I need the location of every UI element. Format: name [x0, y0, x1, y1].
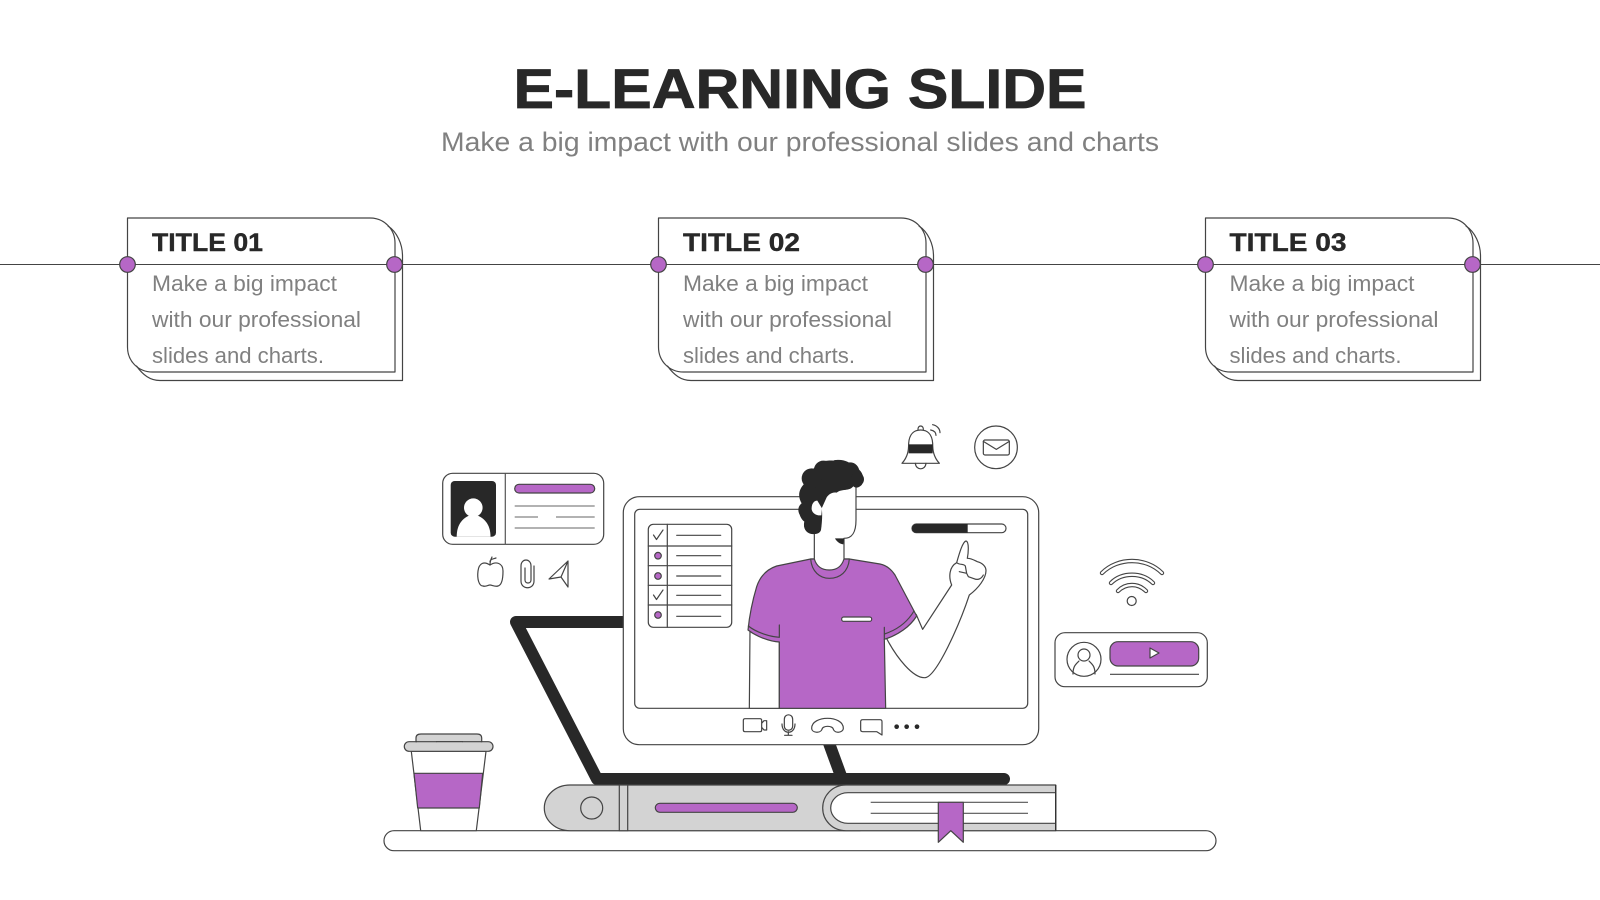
avatar [1067, 642, 1101, 676]
call controls [743, 715, 919, 735]
card body [151, 271, 361, 368]
icon: wifi [1102, 561, 1162, 606]
left arm [749, 630, 779, 708]
book: grey lower [544, 785, 860, 831]
dot left [651, 257, 666, 272]
card title: TITLE 02 [683, 229, 800, 257]
table [384, 831, 1216, 851]
video card [1055, 633, 1207, 687]
presenter figure [748, 460, 986, 708]
avatar photo [451, 481, 496, 537]
icon: paper plane [549, 561, 568, 587]
dot right [1465, 257, 1480, 272]
ear [812, 501, 822, 515]
panel: card 3 [1198, 218, 1480, 380]
progress bar [912, 524, 1006, 533]
laptop stand and base [516, 622, 1004, 779]
coffee cup [404, 734, 493, 831]
goatee [835, 538, 844, 544]
icon: apple [478, 557, 503, 586]
dot right [918, 257, 933, 272]
bookmark [938, 802, 963, 842]
neck and face [814, 485, 856, 570]
dot left [1198, 257, 1213, 272]
dot left [120, 257, 135, 272]
monitor [623, 497, 1039, 745]
dot right [387, 257, 402, 272]
card body: slides and charts. [152, 343, 324, 368]
hair [798, 460, 864, 534]
book: with pages and bookmark [823, 785, 1056, 842]
card title: TITLE 03 [1230, 229, 1346, 257]
icon: paperclip [521, 560, 534, 588]
checklist [648, 524, 732, 627]
title: E-LEARNING SLIDE [514, 57, 1086, 120]
phone [812, 718, 843, 732]
timeline line [0, 264, 1600, 266]
panel: card 1 [120, 218, 402, 380]
card body: Make a big impact [683, 271, 868, 296]
card body: with our professional [682, 307, 892, 332]
chat [861, 720, 882, 735]
card body: slides and charts. [683, 343, 855, 368]
card body: slides and charts. [1230, 343, 1402, 368]
card body [682, 271, 892, 368]
subtitle: Make a big impact with our professional slides and charts [441, 127, 1159, 157]
camera [743, 719, 767, 732]
card body: Make a big impact [152, 271, 337, 296]
shirt [748, 559, 917, 708]
arm [886, 541, 986, 678]
play button [1110, 642, 1199, 666]
card title: TITLE 01 [152, 229, 263, 257]
more dots [894, 724, 919, 729]
card body: with our professional [151, 307, 361, 332]
collar [811, 559, 849, 578]
id card [443, 473, 604, 544]
card body [1228, 271, 1438, 368]
pocket [842, 617, 872, 621]
microphone [782, 715, 795, 735]
panel: card 2 [651, 218, 934, 380]
card body: Make a big impact [1230, 271, 1414, 296]
illustration: e-learning scene [384, 425, 1216, 851]
card body: with our professional [1228, 307, 1438, 332]
icon: bell [902, 425, 940, 469]
icon: mail [975, 426, 1017, 469]
